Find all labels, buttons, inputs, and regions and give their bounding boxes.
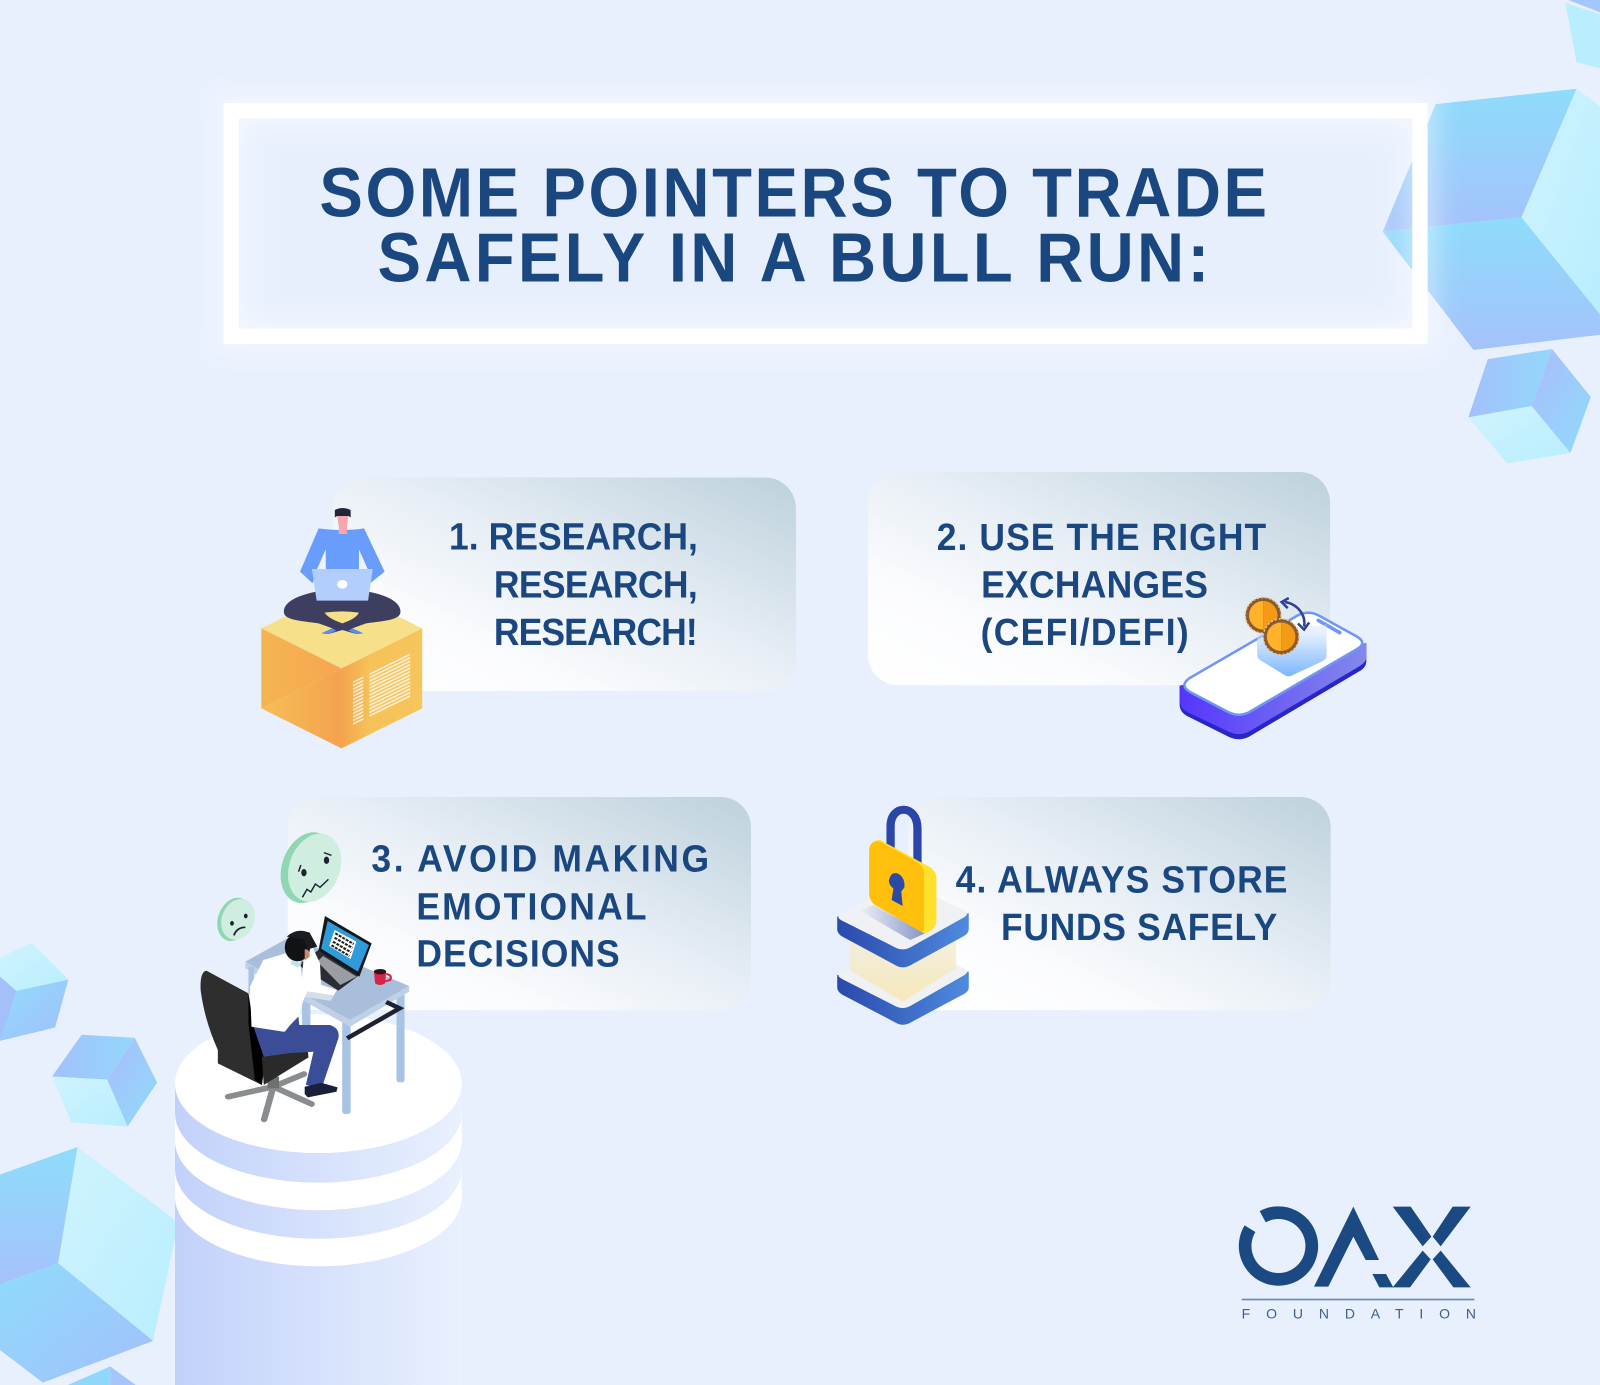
logo: OAX Foundation bbox=[1242, 1207, 1476, 1321]
upper platform bbox=[837, 883, 969, 967]
text: emotional decisions: EMOTIONAL bbox=[416, 885, 647, 928]
man bbox=[250, 931, 339, 1097]
text: exchanges: 2. USE THE RIGHT bbox=[937, 516, 1266, 558]
small worried face bbox=[212, 895, 260, 944]
phone speaker bbox=[1318, 620, 1340, 633]
text: emotional decisions: DECISIONS bbox=[416, 933, 620, 975]
text: research bbox=[449, 515, 698, 653]
icon: stressed man at desk bbox=[201, 827, 409, 1119]
coffee mug bbox=[374, 969, 391, 985]
title bbox=[319, 155, 1267, 297]
arrows bbox=[1282, 598, 1309, 630]
lock shackle bbox=[891, 810, 917, 864]
text: exchanges: EXCHANGES bbox=[981, 563, 1208, 606]
decorative cubes: bottom left bbox=[0, 943, 179, 1385]
panel: store funds bbox=[908, 797, 1331, 1010]
text: store funds: FUNDS SAFELY bbox=[1001, 906, 1277, 948]
lock body bbox=[869, 840, 936, 933]
coins bbox=[1245, 597, 1299, 655]
title frame bbox=[231, 110, 1420, 336]
cylinder pedestal bbox=[175, 1014, 462, 1385]
text: exchanges bbox=[937, 516, 1266, 653]
phone screen bbox=[1184, 613, 1362, 715]
icon: person with laptop on box bbox=[261, 508, 422, 748]
panel: exchanges bbox=[868, 472, 1330, 685]
desk bbox=[245, 937, 409, 1114]
panel: research bbox=[333, 478, 796, 691]
title: SOME POINTERS TO TRADE bbox=[319, 155, 1267, 232]
text: emotional decisions: 3. AVOID MAKING bbox=[371, 838, 709, 880]
text: research: RESEARCH, bbox=[494, 563, 698, 606]
icon: phone with coin exchange bbox=[1180, 597, 1366, 739]
transfer tile bbox=[1257, 624, 1327, 676]
decorative cubes: top right bbox=[1383, 0, 1600, 463]
text: store funds bbox=[956, 858, 1287, 948]
text: research: RESEARCH! bbox=[494, 611, 698, 653]
logo: OAX Foundation: FOUNDATION bbox=[1242, 1305, 1476, 1321]
big worried face bbox=[273, 827, 349, 908]
panel: emotional decisions bbox=[288, 797, 751, 1010]
text: research: 1. RESEARCH, bbox=[449, 515, 698, 558]
laptop bbox=[298, 916, 372, 991]
glass column bbox=[849, 917, 956, 1002]
text: exchanges: (CEFI/DEFI) bbox=[981, 611, 1189, 653]
office chair bbox=[201, 971, 312, 1119]
title: SAFELY IN A BULL RUN: bbox=[378, 220, 1209, 297]
lower platform bbox=[837, 942, 969, 1025]
text: store funds: 4. ALWAYS STORE bbox=[956, 858, 1287, 901]
text: emotional decisions bbox=[371, 838, 709, 975]
icon: padlock on platforms bbox=[837, 810, 969, 1025]
